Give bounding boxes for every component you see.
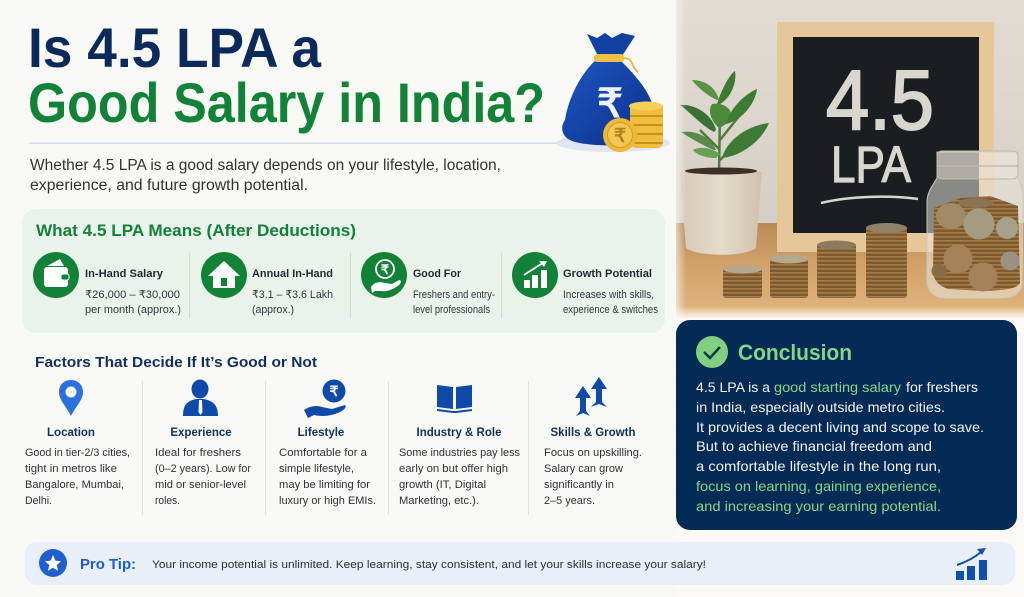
item: growth potential: experience & switches [563, 304, 658, 316]
title: Is 4.5 LPA a [28, 16, 322, 79]
factor: location: Bangalore, Mumbai, [25, 479, 124, 491]
conclusion text: 4.5 LPA is a [696, 379, 770, 395]
factor: lifestyle: Lifestyle [298, 427, 344, 439]
icon: check circle [696, 336, 728, 368]
factor: lifestyle: may be limiting for [279, 479, 370, 491]
factor: location: Delhi. [25, 495, 52, 507]
factor: skills and growth: Focus on upskilling. [544, 447, 642, 459]
item: in-hand salary [85, 268, 181, 316]
item: annual in-hand [252, 268, 333, 316]
intro text [30, 157, 501, 194]
icon: money bag with coins [556, 33, 670, 152]
title: Good Salary in India? [28, 71, 545, 134]
factor: industry and role: growth (IT, Digital [399, 479, 486, 491]
icon: growth chart [512, 252, 558, 298]
icon: rising arrows [575, 377, 607, 416]
icon: hand with rupee: ₹ [330, 383, 339, 399]
factor: location [25, 427, 130, 507]
factor: industry and role: Industry & Role [417, 427, 501, 439]
icon: open book [437, 385, 472, 412]
factor: industry and role: Some industries pay less [399, 447, 520, 459]
panel: conclusion [676, 320, 1017, 530]
conclusion text: in India, especially outside metro cities. [696, 399, 945, 415]
factor: lifestyle: simple lifestyle, [279, 463, 354, 475]
coin stacks [723, 223, 907, 298]
panel: what 4.5 LPA means [22, 209, 665, 333]
conclusion text [696, 379, 984, 514]
item: good for: Good For [413, 268, 462, 280]
plant [680, 71, 769, 174]
icon: money bag with coins: ₹ [597, 82, 623, 126]
pro tip label: Pro Tip: [80, 556, 136, 573]
icon: star badge [39, 549, 67, 577]
factor: skills and growth [544, 427, 642, 507]
conclusion text: a comfortable lifestyle in the long run, [696, 458, 941, 474]
title [28, 16, 545, 134]
factor: lifestyle: luxury or high EMIs. [279, 495, 376, 507]
icon: hand with rupee [304, 380, 346, 418]
icon: money bag with coins: ₹ [614, 126, 626, 147]
plant pot [680, 168, 762, 255]
item: annual in-hand: ₹3.1 – ₹3.6 Lakh [252, 289, 333, 301]
item: in-hand salary: per month (approx.) [85, 304, 181, 316]
chalkboard [777, 22, 994, 252]
conclusion heading: Conclusion [738, 340, 852, 365]
factor: lifestyle: Comfortable for a [279, 447, 368, 459]
conclusion text: But to achieve financial freedom and [696, 438, 932, 454]
section: factors [25, 354, 642, 515]
intro text: Whether 4.5 LPA is a good salary depends on your lifestyle, location, [30, 157, 501, 174]
factor: experience [155, 427, 251, 507]
item: growth potential: Increases with skills, [563, 289, 654, 301]
conclusion text: It provides a decent living and scope to save. [696, 419, 984, 435]
pro tip text: Your income potential is unlimited. Keep learning, stay consistent, and let your skills increase your salary! [152, 559, 706, 571]
icon: growth bars [956, 548, 987, 580]
factor: location: Location [47, 427, 95, 439]
factor: experience: mid or senior-level [155, 479, 246, 491]
icon: hand with rupee coin: ₹ [381, 262, 390, 277]
factor: skills and growth: Salary can grow [544, 463, 623, 475]
item: annual in-hand: (approx.) [252, 304, 294, 316]
panel heading: What 4.5 LPA Means (After Deductions) [36, 221, 356, 240]
conclusion text: good starting salary [774, 379, 901, 395]
icon: location pin [59, 380, 83, 416]
factor: lifestyle [279, 427, 376, 507]
factor: industry and role [399, 427, 520, 507]
factor: skills and growth: Skills & Growth [550, 427, 636, 439]
conclusion text: for freshers [906, 379, 978, 395]
factor: experience: Ideal for freshers [155, 447, 242, 459]
item: annual in-hand: Annual In-Hand [252, 268, 333, 280]
factor: experience: roles. [155, 495, 180, 507]
conclusion text: focus on learning, gaining experience, [696, 478, 941, 494]
factor: industry and role: Marketing, etc.). [399, 495, 479, 507]
conclusion text: and increasing your earning potential. [696, 498, 941, 514]
factor: skills and growth: 2–5 years. [544, 495, 595, 507]
item: good for [413, 268, 495, 316]
item: in-hand salary: In-Hand Salary [85, 268, 164, 280]
icon: person in suit [183, 380, 218, 416]
chalkboard: 4.5 [826, 53, 934, 147]
item: good for: level professionals [413, 304, 490, 316]
item: growth potential [563, 268, 658, 316]
icon: hand with rupee coin [361, 252, 407, 298]
photo: chalkboard, plant, coins and jar [670, 0, 1024, 319]
factor: experience: (0–2 years). Low for [155, 463, 251, 475]
factor: skills and growth: significantly in [544, 479, 614, 491]
icon: wallet [33, 252, 79, 298]
factor: location: Good in tier-2/3 cities, [25, 447, 130, 459]
item: growth potential: Growth Potential [563, 268, 652, 280]
factor: experience: Experience [170, 427, 232, 439]
chalkboard: LPA [831, 136, 911, 193]
panel: pro tip [25, 542, 1015, 585]
item: in-hand salary: ₹26,000 – ₹30,000 [85, 289, 180, 301]
icon: house [201, 252, 247, 298]
jar of coins [927, 151, 1023, 298]
factor: industry and role: early on but offer high [399, 463, 508, 475]
factor: location: tight in metros like [25, 463, 117, 475]
intro text: experience, and future growth potential. [30, 177, 308, 194]
factors heading: Factors That Decide If It’s Good or Not [35, 354, 317, 371]
item: good for: Freshers and entry- [413, 289, 495, 301]
